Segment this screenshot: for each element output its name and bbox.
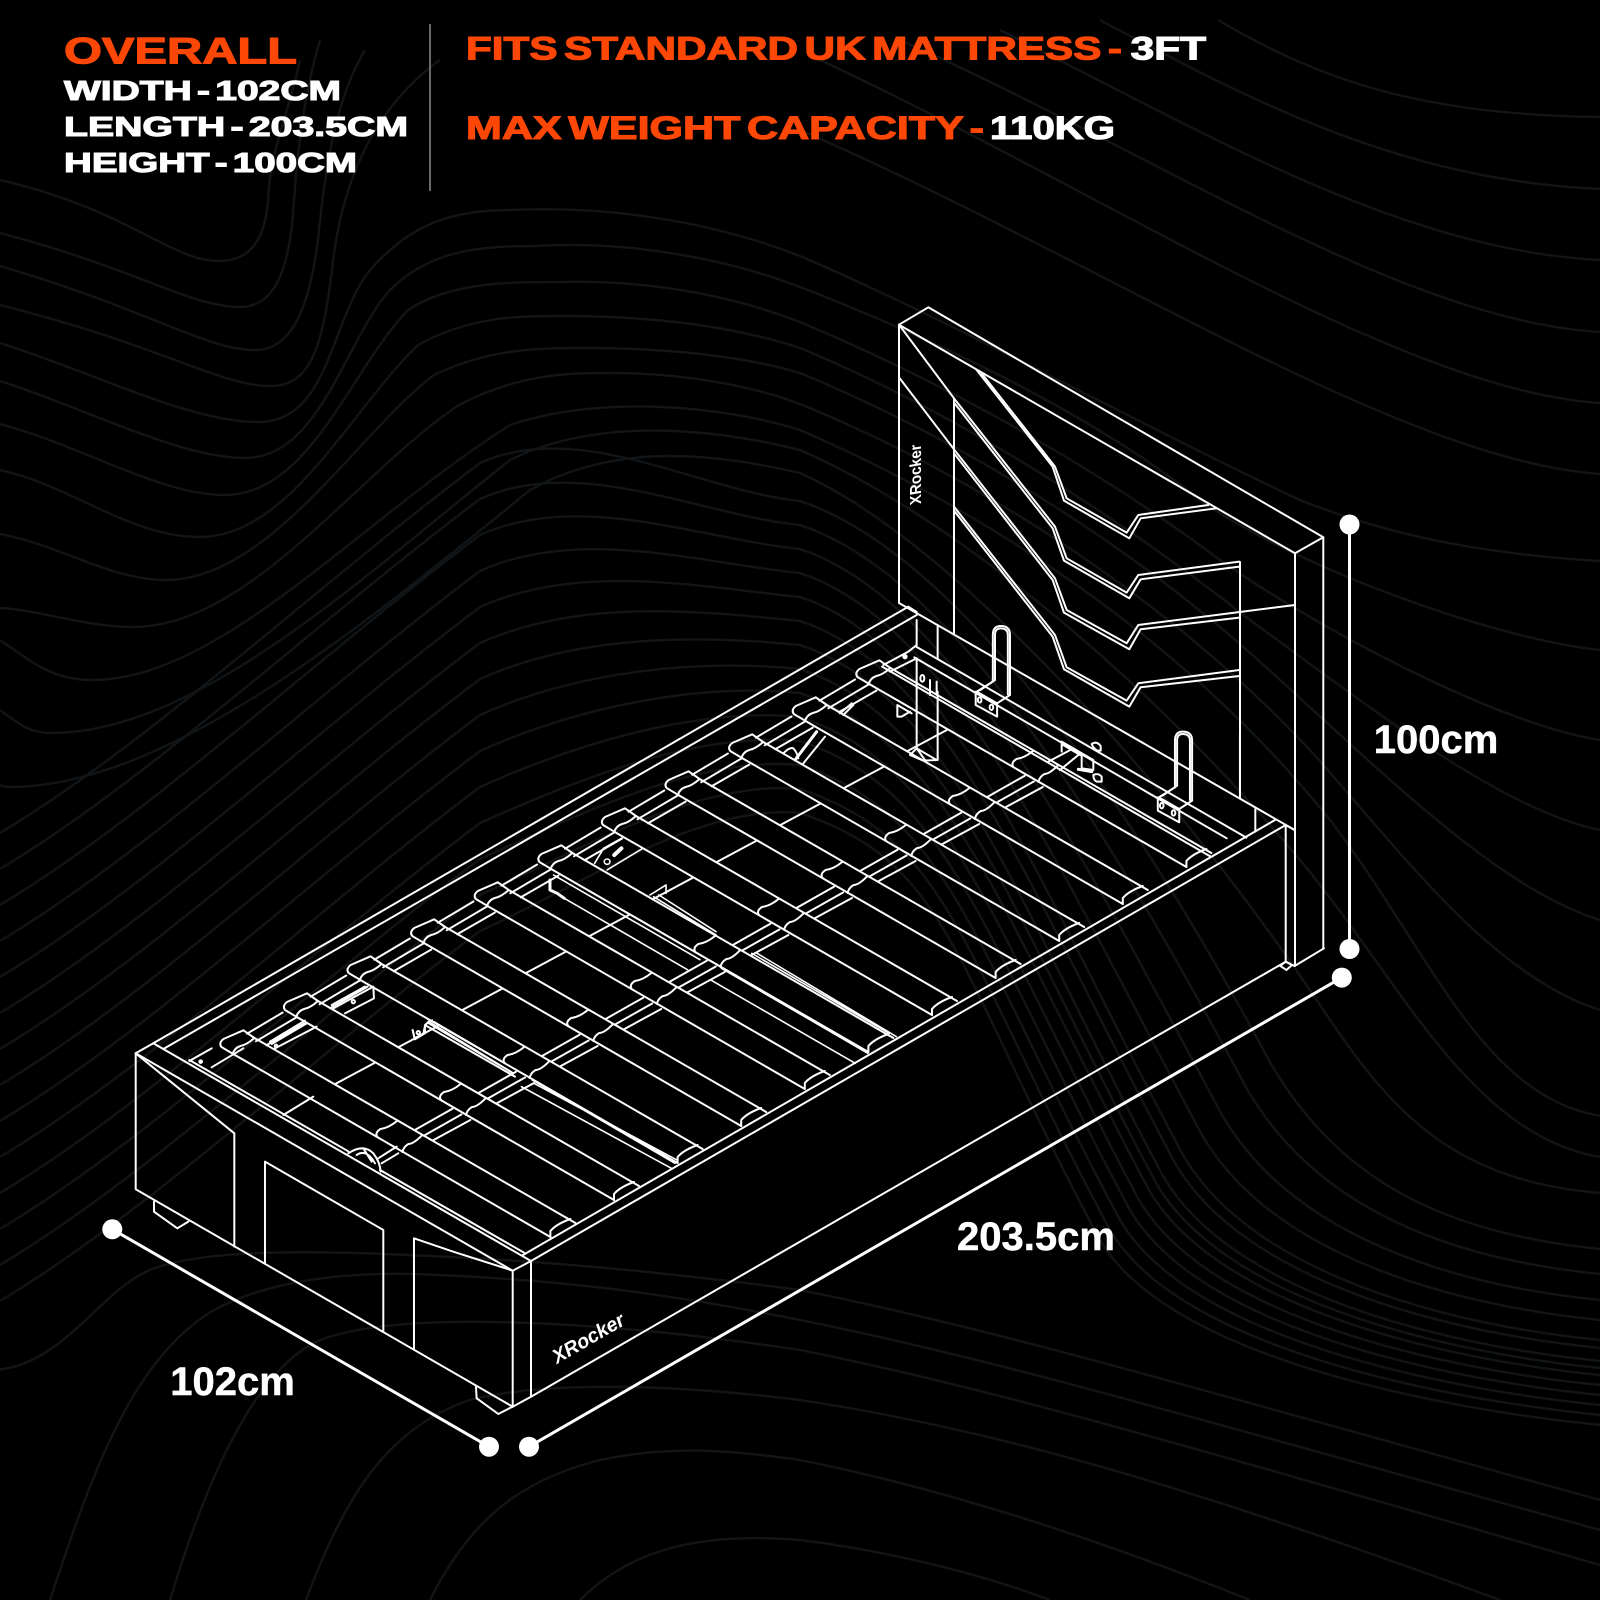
bed frame outline bbox=[136, 607, 1324, 1407]
header: mattress size: 3FT bbox=[1131, 30, 1206, 66]
footboard panels and legs bbox=[136, 987, 524, 1414]
head end rails and hooks bbox=[882, 626, 1292, 970]
header: mattress size bbox=[466, 30, 1206, 66]
length spec: LENGTH - 203.5CM bbox=[64, 111, 408, 142]
headboard outline bbox=[899, 307, 1323, 966]
header: weight capacity: MAX WEIGHT CAPACITY - bbox=[466, 110, 984, 146]
heading: overall: OVERALL bbox=[64, 30, 297, 72]
header: mattress size: FITS STANDARD UK MATTRESS - bbox=[466, 30, 1122, 66]
width spec: WIDTH - 102CM bbox=[64, 75, 341, 106]
dimension: width: 102cm bbox=[170, 1360, 295, 1404]
slats bbox=[220, 660, 1211, 1237]
bed line drawing bbox=[136, 307, 1324, 1414]
headboard stripes bbox=[899, 325, 1295, 707]
header: weight capacity: 110KG bbox=[990, 110, 1115, 146]
hooks bbox=[976, 626, 1192, 822]
dimension: length bbox=[519, 968, 1352, 1457]
header: weight capacity bbox=[466, 110, 1115, 146]
centre bracket bbox=[1048, 742, 1102, 782]
logo on side rail: XRocker bbox=[548, 1309, 630, 1369]
dimension: length: 203.5cm bbox=[957, 1215, 1115, 1259]
lift mechanism bars bbox=[412, 838, 896, 1168]
header: overall dimensions bbox=[64, 30, 408, 178]
head end legs and hardware bbox=[783, 620, 938, 763]
dimension: height bbox=[1340, 514, 1498, 959]
logo on headboard: XRocker bbox=[907, 440, 925, 509]
dimension: width bbox=[102, 1219, 499, 1457]
centre strap and rail segments bbox=[247, 680, 1043, 1140]
dimension: height: 100cm bbox=[1374, 718, 1498, 762]
height spec: HEIGHT - 100CM bbox=[64, 147, 357, 178]
